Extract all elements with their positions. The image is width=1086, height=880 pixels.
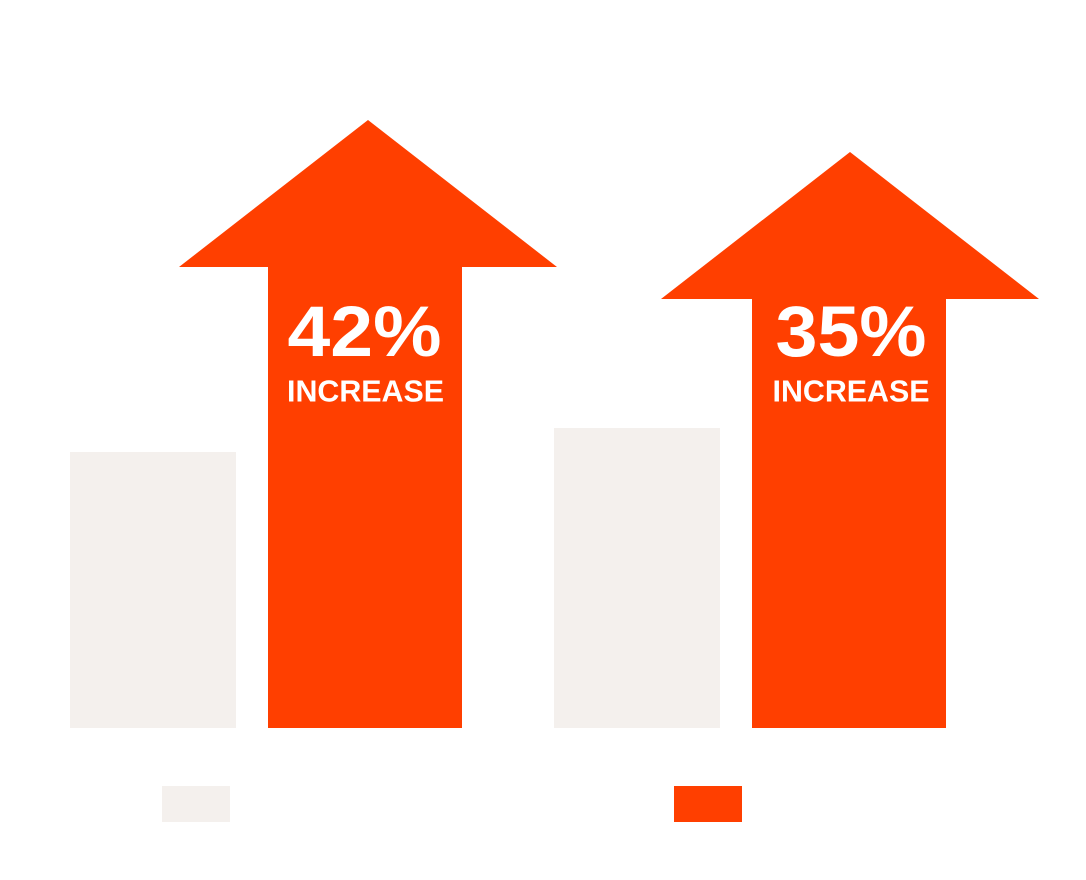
arrow: first group 42% increase — [179, 120, 557, 728]
bar: second group baseline — [554, 428, 720, 728]
legend swatch: baseline — [162, 786, 230, 822]
bar: first group baseline — [70, 452, 236, 728]
arrow: first group 42% increase: INCREASE — [287, 374, 444, 408]
legend swatch: increase — [674, 786, 742, 822]
arrow: second group 35% increase: 35% — [776, 293, 926, 372]
arrow: second group 35% increase — [661, 152, 1039, 728]
arrow: second group 35% increase: INCREASE — [772, 374, 930, 408]
arrow: first group 42% increase: 42% — [288, 293, 442, 372]
